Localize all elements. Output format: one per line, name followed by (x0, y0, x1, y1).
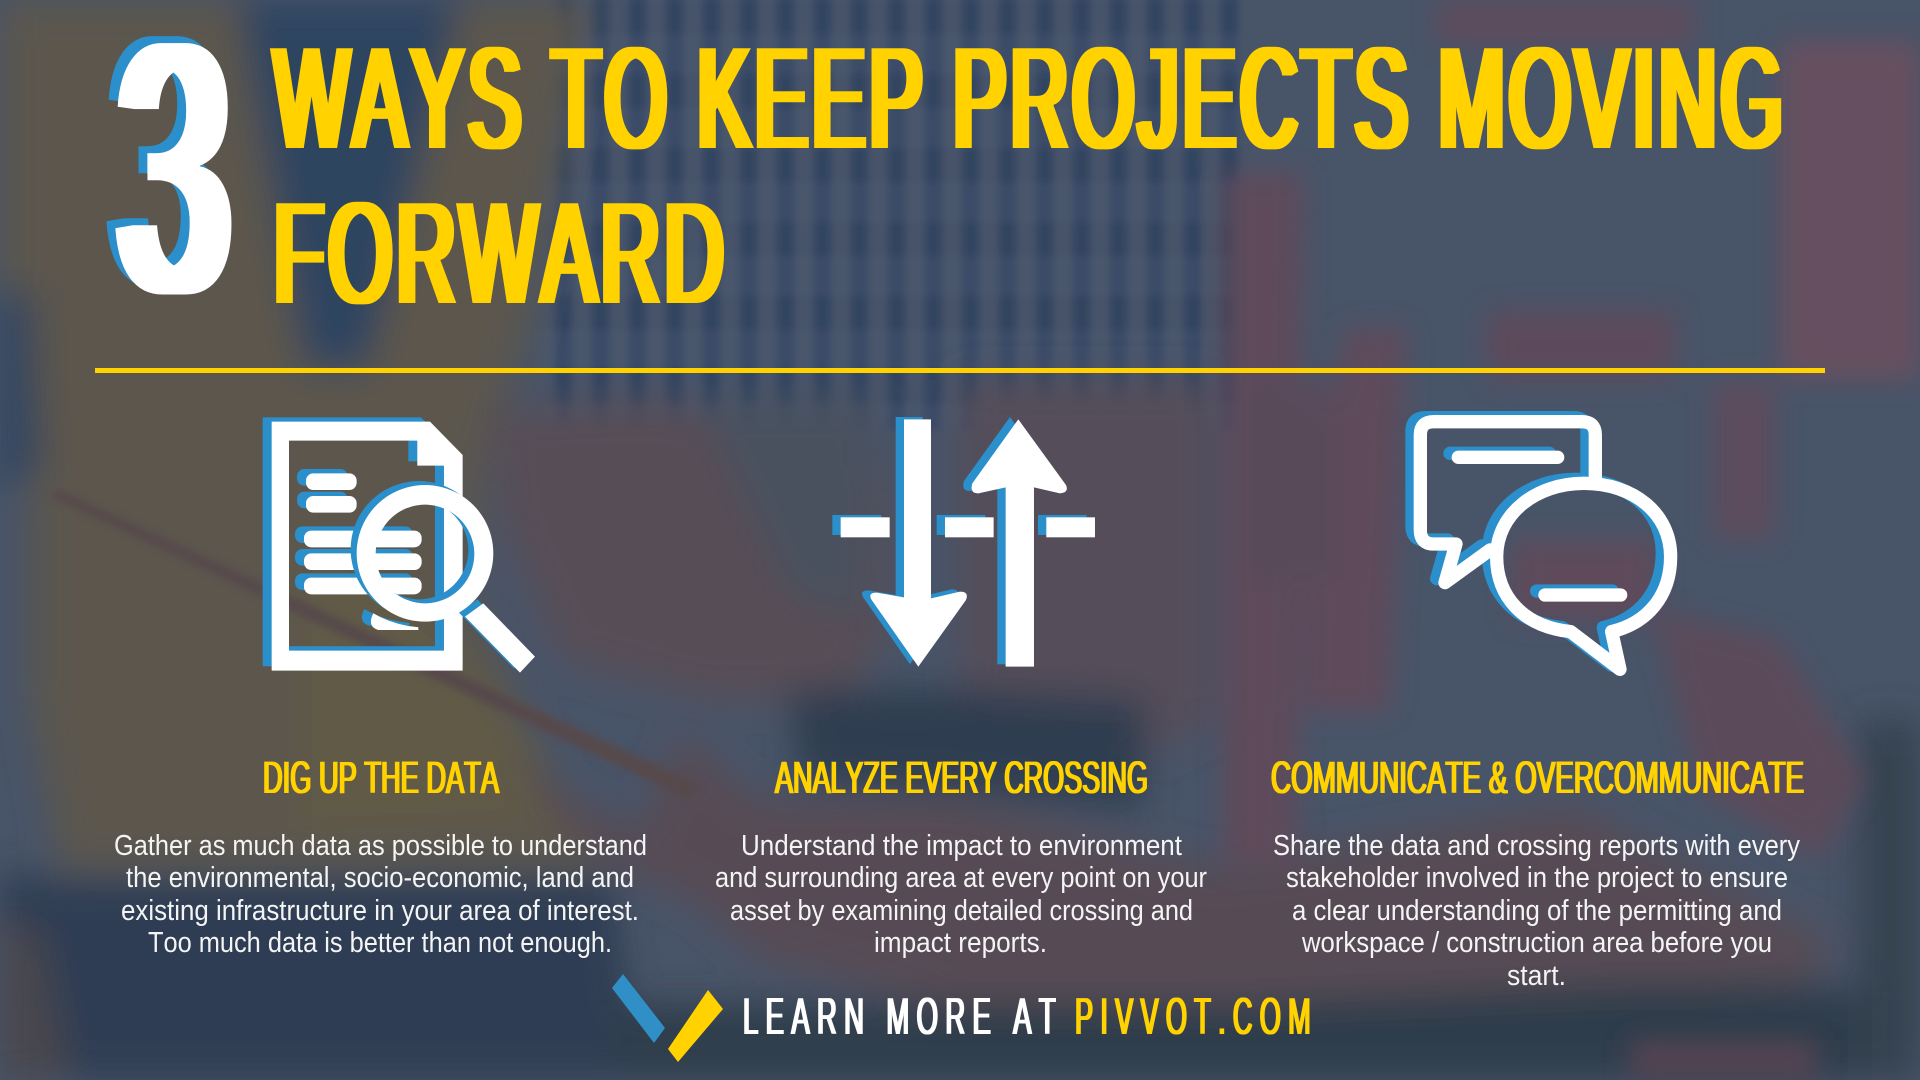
text block: communicate and overcommunicate: stakeholder involved in the project to ensure (1286, 862, 1788, 894)
text block: communicate and overcommunicate: workspace / construction area before you (1301, 927, 1772, 959)
text block: dig up the data: the environmental, socio-economic, land and (126, 862, 634, 894)
call to action text: PIVVOT.COM (1075, 988, 1318, 1046)
text block: analyze every crossing: asset by examining detailed crossing and (730, 895, 1193, 927)
title (274, 17, 1787, 334)
text block: dig up the data: Gather as much data as possible to understand (114, 830, 647, 862)
panel: dig up the data (114, 752, 647, 959)
heading: dig up the data: DIG UP THE DATA (263, 752, 499, 803)
icon: speech bubbles (1412, 418, 1671, 669)
text block: analyze every crossing: and surrounding area at every point on your (715, 862, 1207, 894)
text block: dig up the data: Too much data is better than not enough. (148, 927, 612, 959)
icon: document with magnifier (263, 417, 535, 673)
text block: communicate and overcommunicate: Share the data and crossing reports with every (1273, 830, 1800, 862)
call to action text: LEARN MORE AT (743, 988, 1063, 1046)
icon: crossing arrows (832, 417, 1095, 667)
icon: pivvot logo (612, 974, 723, 1062)
panel: analyze every crossing (715, 752, 1207, 959)
text block: communicate and overcommunicate: start. (1507, 960, 1566, 992)
text block: analyze every crossing: Understand the impact to environment (741, 830, 1182, 862)
text block: dig up the data: existing infrastructure in your area of interest. (121, 895, 639, 927)
text block: communicate and overcommunicate (1273, 830, 1800, 992)
heading: analyze every crossing: ANALYZE EVERY CROSSING (775, 752, 1148, 803)
text block: communicate and overcommunicate: a clear understanding of the permitting and (1292, 895, 1782, 927)
footer: logo and call to action (612, 974, 1318, 1062)
text block: analyze every crossing: impact reports. (874, 927, 1047, 959)
text block: dig up the data (114, 830, 647, 959)
title: FORWARD (274, 172, 728, 334)
panel: communicate and overcommunicate (1271, 752, 1804, 992)
text block: analyze every crossing (715, 830, 1207, 959)
